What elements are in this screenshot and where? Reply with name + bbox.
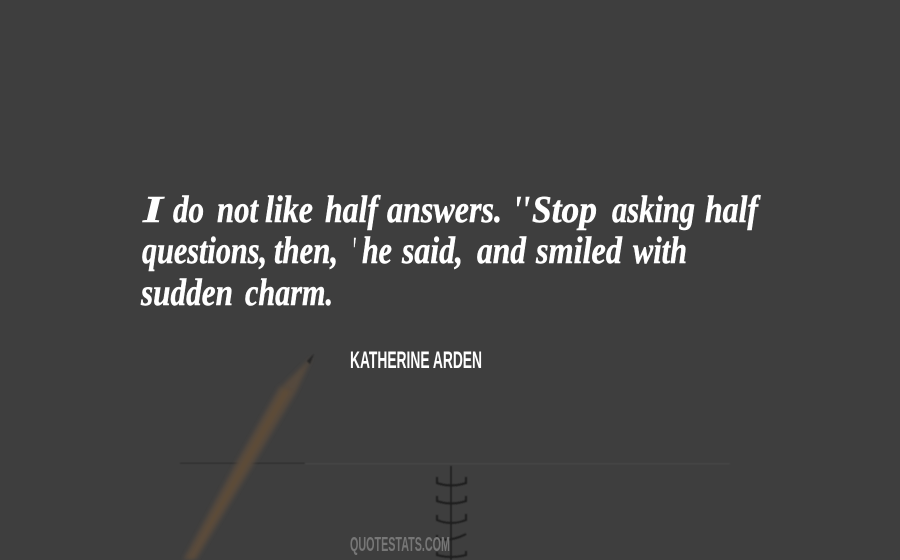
quote line 3 — [140, 272, 333, 314]
quote line 2: then, — [274, 230, 338, 272]
quote line 2: smiled — [535, 230, 623, 272]
notebook top edge — [180, 463, 730, 464]
quote line 2: ' — [352, 230, 356, 272]
quote line 3: sudden — [140, 272, 233, 314]
quote text — [140, 189, 761, 314]
quote line 1: half — [705, 189, 761, 231]
quote line 1: '' — [513, 189, 530, 231]
icon: pencil tip — [307, 354, 314, 364]
quote line 2: said, — [401, 230, 463, 272]
icon: notebook spiral binding — [437, 466, 466, 560]
quote line 1 — [142, 189, 761, 231]
author name: KATHERINE ARDEN — [350, 347, 482, 374]
quote line 1: like — [265, 189, 313, 231]
quote line 1: I — [142, 189, 165, 231]
quote line 3: charm. — [245, 272, 333, 314]
icon: pencil — [183, 357, 312, 560]
quote line 2: questions, — [142, 230, 267, 272]
watermark: QUOTESTATS.COM — [350, 534, 450, 556]
quote line 2: with — [633, 230, 687, 272]
quote line 1: answers. — [387, 189, 502, 231]
quote line 1: half — [325, 189, 381, 231]
quote line 2: he — [362, 230, 392, 272]
quote line 1: do — [173, 189, 204, 231]
quote line 2: and — [477, 230, 527, 272]
quote line 2 — [142, 230, 687, 272]
quote line 1: Stop — [532, 189, 597, 231]
quote line 1: not — [217, 189, 259, 231]
quote line 1: asking — [612, 189, 695, 231]
